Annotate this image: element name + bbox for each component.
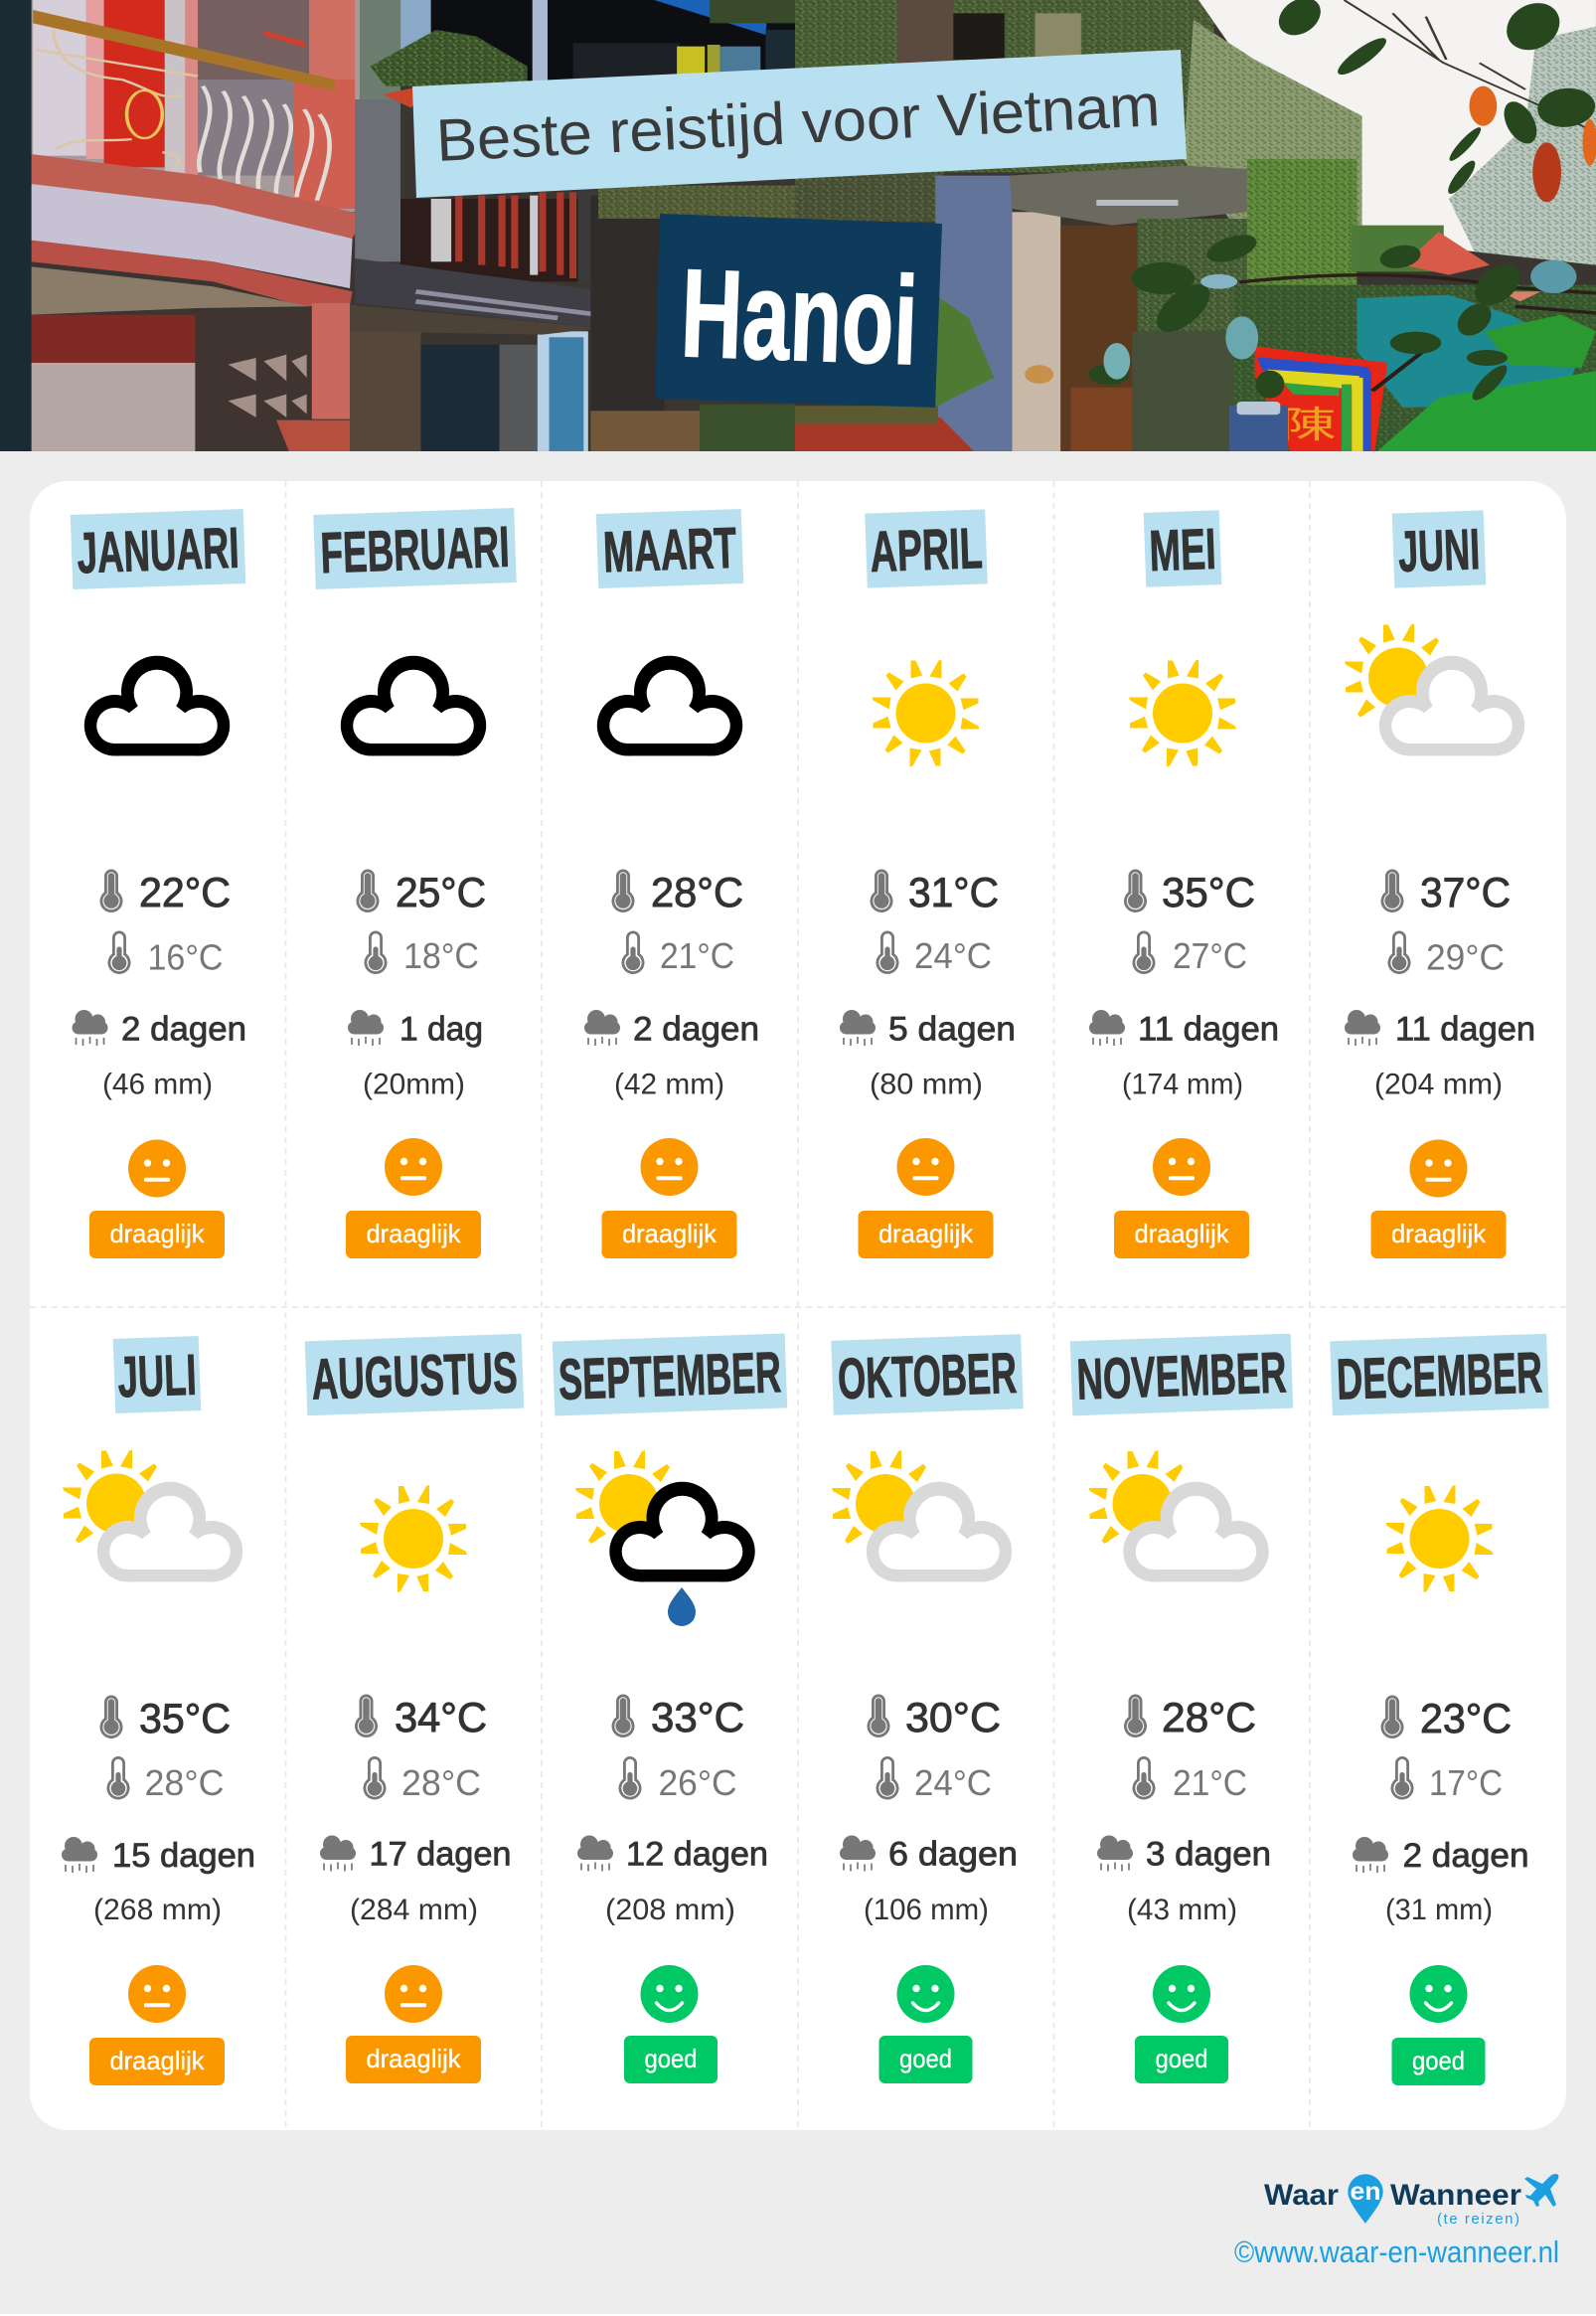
icon: sun (1385, 1485, 1493, 1592)
min temperature: 17°C (1429, 1762, 1503, 1803)
min temperature: 21°C (1173, 1762, 1247, 1803)
month label (71, 509, 245, 589)
rating badge: draaglijk (1391, 1219, 1487, 1248)
icon: sun (873, 660, 980, 767)
rating face (385, 1965, 442, 2023)
min temperature (1133, 930, 1247, 976)
rainfall: (174 mm) (1122, 1068, 1243, 1101)
rating badge: goed (644, 2044, 698, 2073)
panel: juli (62, 1336, 255, 2085)
rainfall: (20mm) (363, 1068, 465, 1101)
icon: sun, cloud and rain drop (575, 1450, 755, 1626)
rating face (896, 1138, 954, 1196)
logo word: Wanneer: Wanneer (1390, 2179, 1521, 2212)
month label: MEI (1148, 517, 1217, 583)
max temperature (356, 869, 486, 915)
icon: sun behind cloud (832, 1450, 1012, 1581)
rain days (840, 1835, 1018, 1873)
max temperature: 22°C (139, 869, 231, 915)
min temperature: 28°C (145, 1762, 225, 1803)
month label: JANUARI (76, 516, 240, 585)
min temperature: 27°C (1173, 935, 1247, 976)
rating badge: draaglijk (109, 1219, 205, 1248)
month label (305, 1334, 524, 1415)
max temperature: 35°C (1162, 869, 1255, 915)
rating badge: draaglijk (622, 1219, 718, 1248)
rain days: 17 dagen (370, 1835, 511, 1873)
min temperature (618, 1756, 737, 1803)
panel: april (840, 509, 1016, 1258)
month label: APRIL (869, 516, 984, 584)
rating badge: draaglijk (878, 1219, 974, 1248)
rain days: 3 dagen (1146, 1835, 1271, 1873)
panel: september (553, 1333, 787, 2083)
month label (1144, 510, 1221, 587)
pin label: en (1350, 2178, 1381, 2206)
rating face (640, 1965, 698, 2023)
city name: Hanoi (679, 243, 920, 391)
rain days: 11 dagen (1395, 1010, 1535, 1048)
max temperature: 28°C (651, 869, 743, 915)
rainfall: (208 mm) (605, 1894, 735, 1926)
min temperature (107, 1756, 225, 1803)
rain days (348, 1010, 483, 1048)
rain days (584, 1010, 759, 1048)
min temperature: 24°C (914, 1762, 992, 1803)
photo right: foliage, sky and shrine (795, 0, 1596, 451)
month label: AUGUSTUS (310, 1340, 519, 1412)
city banner (655, 214, 942, 408)
min temperature (1387, 930, 1505, 978)
icon: cloud (84, 656, 230, 755)
rating badge: goed (899, 2044, 952, 2073)
max temperature: 35°C (139, 1695, 231, 1741)
max temperature: 37°C (1420, 869, 1511, 915)
min temperature: 16°C (147, 936, 223, 978)
min temperature (1391, 1756, 1503, 1803)
max temperature: 34°C (395, 1694, 487, 1740)
max temperature (867, 1694, 1001, 1740)
month label (113, 1336, 201, 1413)
panel: juni (1345, 510, 1535, 1258)
rating badge: goed (1412, 2046, 1465, 2075)
panel: november (1070, 1334, 1293, 2083)
month label (596, 509, 743, 588)
min temperature: 24°C (914, 935, 992, 976)
rain days: 15 dagen (112, 1837, 255, 1875)
max temperature (1381, 869, 1511, 915)
rating face (1153, 1965, 1210, 2023)
rainfall: (106 mm) (864, 1894, 989, 1926)
icon: plane (1524, 2174, 1558, 2207)
max temperature: 23°C (1420, 1695, 1512, 1741)
rain days: 2 dagen (121, 1010, 246, 1048)
month label (1070, 1334, 1293, 1415)
title text: Beste reistijd voor Vietnam (434, 72, 1162, 174)
rating face (640, 1138, 698, 1196)
min temperature (877, 1756, 992, 1803)
title banner (412, 50, 1187, 198)
rating badge (624, 2036, 718, 2083)
rainfall: (268 mm) (93, 1894, 222, 1926)
max temperature: 28°C (1162, 1694, 1256, 1740)
rating face (1153, 1138, 1210, 1196)
panel: februari (313, 508, 517, 1258)
month label: JUNI (1397, 517, 1481, 584)
rain days: 1 dag (399, 1010, 483, 1048)
max temperature (99, 1695, 231, 1741)
rating badge (89, 2038, 225, 2085)
panel: oktober (831, 1334, 1024, 2083)
rating badge (346, 1211, 481, 1258)
rain days: 2 dagen (1403, 1837, 1528, 1875)
min temperature: 18°C (403, 935, 479, 976)
rain days (1353, 1837, 1528, 1875)
month label: JULI (116, 1343, 198, 1409)
rain days: 12 dagen (626, 1835, 768, 1873)
icon: map pin (1348, 2174, 1383, 2224)
icon: sun behind cloud (63, 1449, 242, 1581)
rain days (72, 1010, 246, 1048)
panel: december (1330, 1334, 1549, 2085)
rainfall: (46 mm) (102, 1068, 213, 1101)
hero photo: Hanoi street (0, 0, 1596, 451)
rating badge (1391, 2038, 1485, 2085)
rainfall: (80 mm) (870, 1068, 983, 1101)
max temperature: 30°C (905, 1694, 1001, 1740)
month label (1392, 510, 1486, 588)
month label (865, 509, 988, 588)
icon: cloud (341, 656, 486, 755)
min temperature (1133, 1756, 1247, 1803)
max temperature (871, 869, 999, 915)
rainfall: (31 mm) (1385, 1894, 1493, 1926)
panel: maart (584, 509, 759, 1258)
rainfall: (43 mm) (1127, 1894, 1237, 1926)
icon: sun (360, 1485, 467, 1592)
month label: MAART (602, 516, 737, 584)
month label (831, 1334, 1024, 1415)
rating badge (1371, 1211, 1507, 1258)
min temperature (364, 1756, 481, 1803)
rainfall: (204 mm) (1374, 1068, 1503, 1101)
max temperature (1381, 1695, 1512, 1741)
rating face (1409, 1139, 1467, 1197)
max temperature (99, 869, 231, 915)
rating badge (602, 1211, 737, 1258)
rating face (896, 1965, 954, 2023)
rating badge (89, 1211, 225, 1258)
photo right: foliage, sky and shrine: 陳 (1280, 406, 1337, 445)
icon: sun behind cloud (1089, 1450, 1269, 1581)
logo tagline: (te reizen) (1437, 2211, 1521, 2228)
rain days (840, 1010, 1016, 1048)
min temperature (107, 930, 223, 978)
rating badge: draaglijk (1135, 1219, 1229, 1248)
max temperature: 25°C (396, 869, 486, 915)
rating face (128, 1965, 186, 2023)
min temperature: 21°C (660, 935, 734, 976)
rainfall: (284 mm) (350, 1894, 478, 1926)
rating badge (346, 2036, 481, 2083)
icon: rain drop (668, 1587, 696, 1626)
max temperature (612, 869, 743, 915)
rain days: 11 dagen (1138, 1010, 1279, 1048)
max temperature: 33°C (651, 1694, 744, 1740)
icon: sun (1129, 660, 1236, 767)
rating face (1409, 1965, 1467, 2023)
rating badge (1135, 2036, 1228, 2083)
rain days: 2 dagen (633, 1010, 759, 1048)
month label (553, 1333, 787, 1416)
rating badge: draaglijk (366, 1219, 461, 1248)
panel: mei (1089, 510, 1279, 1258)
photo left: balcony and building (0, 0, 795, 451)
month label: FEBRUARI (319, 515, 511, 585)
max temperature (355, 1694, 487, 1740)
month label (313, 508, 517, 589)
rating badge: goed (1155, 2044, 1208, 2073)
rating badge: draaglijk (109, 2046, 205, 2075)
rating face (385, 1138, 442, 1196)
min temperature (364, 930, 479, 976)
min temperature: 29°C (1426, 936, 1505, 978)
min temperature (622, 930, 734, 976)
rating badge (878, 2036, 972, 2083)
icon: cloud (597, 656, 742, 755)
calendar card (30, 481, 1566, 2130)
rain days: 5 dagen (888, 1010, 1016, 1048)
panel: januari (71, 509, 246, 1258)
rating face (128, 1139, 186, 1197)
min temperature: 28°C (401, 1762, 481, 1803)
month label: NOVEMBER (1075, 1340, 1288, 1412)
logo word: Waar: Waar (1264, 2179, 1339, 2212)
min temperature (877, 930, 992, 976)
rating badge: draaglijk (366, 2044, 461, 2073)
rainfall: (42 mm) (614, 1068, 724, 1101)
month label: OKTOBER (837, 1341, 1018, 1411)
rating badge (1114, 1211, 1249, 1258)
website credit: ©www.waar-en-wanneer.nl (1234, 2234, 1559, 2269)
panel: augustus (305, 1334, 524, 2083)
rain days: 6 dagen (888, 1835, 1018, 1873)
min temperature: 26°C (658, 1762, 737, 1803)
logo: Waar en Wanneer (1264, 2174, 1558, 2228)
rating badge (859, 1211, 994, 1258)
max temperature: 31°C (908, 869, 999, 915)
month label: SEPTEMBER (558, 1340, 782, 1412)
icon: sun behind cloud (1345, 624, 1524, 755)
